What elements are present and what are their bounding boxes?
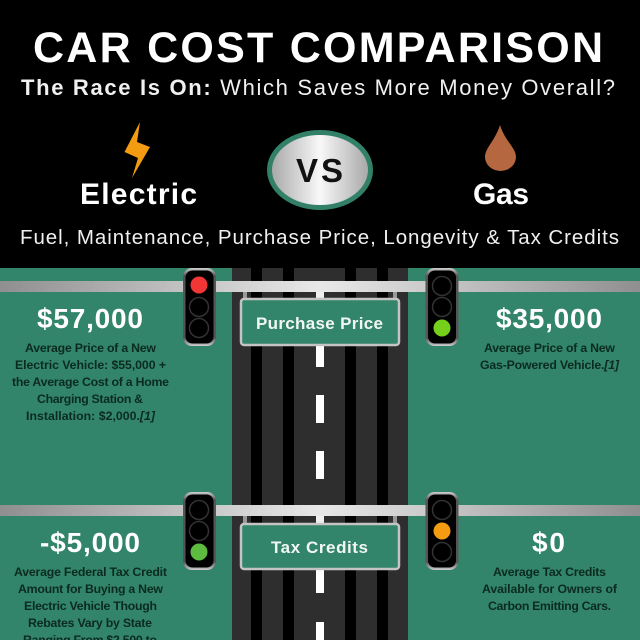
electric tax credits: Rebates Vary by State [28, 616, 152, 630]
sign: purchase price [241, 299, 399, 345]
label: gas: Gas [473, 178, 529, 211]
icon: lightning bolt [124, 122, 150, 178]
electric purchase price: Average Price of a New [25, 341, 156, 355]
road [232, 268, 408, 640]
subtitle: The Race Is On: Which Saves More Money Overall? [21, 75, 615, 100]
gas tax credits: Average Tax Credits [493, 565, 606, 579]
comparison factors line: Fuel, Maintenance, Purchase Price, Longevity & Tax Credits [20, 226, 619, 249]
vs badge: VS [296, 152, 343, 189]
electric purchase price: Installation: $2,000.[1] [26, 409, 156, 423]
electric purchase price: $57,000 [37, 303, 143, 334]
gas tax credits: $0 [532, 527, 565, 558]
electric purchase price: Charging Station & [37, 392, 143, 406]
sign: tax credits [241, 524, 399, 569]
gas tax credits [482, 527, 618, 613]
gas purchase price: Gas-Powered Vehicle.[1] [480, 358, 620, 372]
electric purchase price [12, 303, 169, 423]
sign: purchase price: Purchase Price [256, 314, 383, 333]
gas purchase price: Average Price of a New [484, 341, 615, 355]
traffic light: gas purchase price, green [426, 268, 458, 346]
label: electric: Electric [80, 178, 197, 211]
title: CAR COST COMPARISON [33, 24, 603, 72]
sign: tax credits: Tax Credits [271, 538, 368, 557]
header background [0, 0, 640, 268]
traffic light: gas tax credits, amber [426, 492, 458, 570]
traffic light: electric purchase price, red [183, 268, 216, 346]
vs badge [270, 132, 370, 208]
overhead pole: purchase price [0, 281, 640, 298]
gas purchase price: $35,000 [496, 303, 602, 334]
electric tax credits [14, 527, 167, 640]
electric tax credits: Amount for Buying a New [18, 582, 163, 596]
green background [0, 268, 640, 640]
gas purchase price [480, 303, 620, 372]
gas tax credits: Carbon Emitting Cars. [488, 599, 611, 613]
icon: gas drop [485, 125, 516, 171]
traffic light: electric tax credits, green [183, 492, 216, 570]
electric tax credits: Electric Vehicle Though [24, 599, 157, 613]
overhead pole: tax credits [0, 505, 640, 523]
electric purchase price: the Average Cost of a Home [12, 375, 169, 389]
electric tax credits: -$5,000 [40, 527, 140, 558]
electric purchase price: Electric Vehicle: $55,000 + [15, 358, 166, 372]
electric tax credits: Average Federal Tax Credit [14, 565, 167, 579]
gas tax credits: Available for Owners of [482, 582, 618, 596]
